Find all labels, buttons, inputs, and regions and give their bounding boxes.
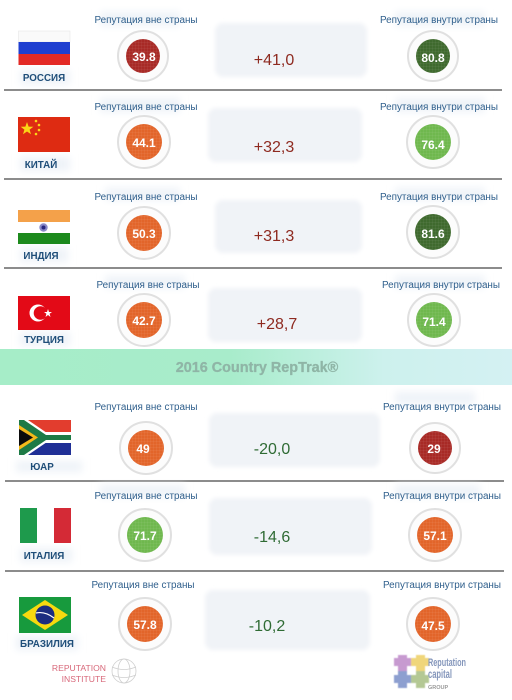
country name: ИТАЛИЯ <box>24 551 64 562</box>
score outside 39.8: 39.8 <box>132 50 156 64</box>
label: inside reputation: Репутация внутри страны <box>380 102 498 113</box>
score outside 42.7 <box>118 294 170 346</box>
delta panel: -10,2 <box>249 618 285 635</box>
delta panel <box>209 498 372 555</box>
score outside 42.7: 42.7 <box>132 314 156 328</box>
label: outside reputation: Репутация вне страны <box>94 102 198 113</box>
label: inside reputation: Репутация внутри страны <box>380 192 498 203</box>
label: outside reputation: Репутация вне страны <box>94 491 198 502</box>
score inside 57.1 <box>409 509 461 561</box>
label: inside reputation: Репутация внутри страны <box>382 280 500 291</box>
score outside 39.8 <box>118 31 168 81</box>
score inside 76.4 <box>407 116 459 168</box>
label: inside reputation: Репутация внутри страны <box>383 580 501 591</box>
row: Turkey <box>18 276 500 346</box>
logo: Reputation Capital Group: capital <box>428 667 452 681</box>
score outside 44.1 <box>118 116 170 168</box>
flag: Brazil <box>19 597 71 633</box>
label: inside reputation: Репутация внутри страны <box>380 15 498 26</box>
logo: Reputation Capital Group <box>394 655 466 691</box>
banner: 2016 Country RepTrak® <box>176 360 339 376</box>
logo: Reputation Institute <box>52 659 136 684</box>
score inside 47.5 <box>407 598 459 650</box>
delta panel <box>209 413 380 467</box>
score inside 71.4: 71.4 <box>422 315 446 329</box>
delta panel: +31,3 <box>254 228 294 245</box>
score outside 50.3: 50.3 <box>132 227 156 241</box>
delta panel: +32,3 <box>254 139 294 156</box>
country name: БРАЗИЛИЯ <box>20 639 74 650</box>
label: inside reputation: Репутация внутри страны <box>383 491 501 502</box>
score inside 47.5: 47.5 <box>421 619 445 633</box>
score outside 71.7: 71.7 <box>133 529 157 543</box>
flag: Russia <box>18 31 70 65</box>
delta panel: -20,0 <box>254 441 290 458</box>
row: India <box>4 188 502 269</box>
score outside 49: 49 <box>136 442 150 456</box>
flag: China <box>18 117 70 152</box>
delta panel <box>215 23 367 77</box>
score outside 71.7 <box>119 509 171 561</box>
flag: South Africa <box>19 420 71 455</box>
row: China <box>4 98 502 180</box>
row: South Africa <box>5 392 504 482</box>
row: Russia <box>4 12 502 91</box>
score outside 50.3 <box>118 207 170 259</box>
flag: Italy <box>20 508 71 543</box>
score outside 44.1: 44.1 <box>132 136 156 150</box>
logo: Reputation Capital Group: Reputation <box>428 657 466 669</box>
flag: India <box>18 210 70 244</box>
country name: ЮАР <box>30 462 54 473</box>
country name: КИТАЙ <box>25 159 57 171</box>
score inside 81.6: 81.6 <box>421 227 445 241</box>
score inside 57.1: 57.1 <box>423 529 447 543</box>
country name: ТУРЦИЯ <box>24 335 64 346</box>
label: outside reputation: Репутация вне страны <box>94 402 198 413</box>
logo: Reputation Capital Group: GROUP <box>428 685 448 691</box>
score inside 29 <box>410 423 460 473</box>
logo: Reputation Institute: INSTITUTE <box>62 674 106 684</box>
score outside 57.8: 57.8 <box>133 618 157 632</box>
score inside 81.6 <box>407 206 459 258</box>
score inside 71.4 <box>408 294 460 346</box>
delta panel <box>208 108 362 162</box>
label: inside reputation: Репутация внутри страны <box>383 402 501 413</box>
delta panel: +28,7 <box>257 316 297 333</box>
delta panel: -14,6 <box>254 529 290 546</box>
score outside 49 <box>120 422 172 474</box>
delta panel: +41,0 <box>254 52 294 69</box>
banner <box>0 349 512 385</box>
row: Brazil <box>16 580 501 650</box>
label: outside reputation: Репутация вне страны <box>96 280 200 291</box>
row: Italy <box>5 485 504 572</box>
delta panel <box>208 288 362 342</box>
delta panel <box>205 590 370 650</box>
label: outside reputation: Репутация вне страны <box>91 580 195 591</box>
score outside 57.8 <box>119 598 171 650</box>
label: outside reputation: Репутация вне страны <box>94 15 198 26</box>
score inside 29: 29 <box>427 442 441 456</box>
country name: ИНДИЯ <box>23 251 59 262</box>
flag: Turkey <box>18 296 70 330</box>
label: outside reputation: Репутация вне страны <box>94 192 198 203</box>
score inside 76.4: 76.4 <box>421 138 445 152</box>
logo: Reputation Institute: REPUTATION <box>52 663 106 673</box>
delta panel <box>215 200 362 253</box>
score inside 80.8: 80.8 <box>421 51 445 65</box>
country name: РОССИЯ <box>23 73 65 84</box>
score inside 80.8 <box>408 31 458 81</box>
